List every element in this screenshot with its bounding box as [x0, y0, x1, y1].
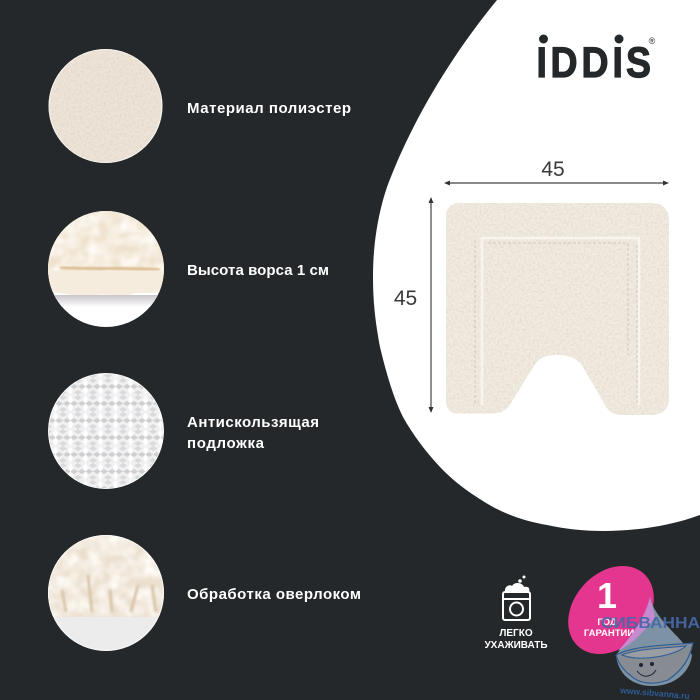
watermark: drop with bathtub — [616, 597, 693, 686]
height dimension — [394, 197, 434, 413]
feature 3 label: подложка — [187, 435, 265, 452]
white curved panel — [373, 0, 700, 531]
bath mat product photo — [446, 203, 669, 415]
logo: IDDIS — [537, 39, 651, 87]
feature 3 label — [187, 414, 319, 452]
feature 2 label: Высота ворса 1 см — [187, 262, 329, 279]
feature 4: overlock swatch — [48, 535, 164, 651]
warranty badge — [551, 549, 671, 671]
feature 4 label: Обработка оверлоком — [187, 586, 361, 603]
logo: ® — [649, 36, 656, 46]
feature 1 label: Материал полиэстер — [187, 100, 351, 117]
easy care label: УХАЖИВАТЬ — [484, 640, 548, 651]
width dimension: 45 — [541, 158, 565, 181]
easy care label: ЛЕГКО — [499, 628, 533, 639]
icon: washing machine — [503, 576, 530, 620]
width dimension — [444, 158, 669, 186]
warranty badge: 1 — [597, 575, 617, 616]
watermark: brand text: СИБВАННА — [601, 615, 700, 632]
height dimension: 45 — [394, 287, 417, 310]
feature 3 label: Антискользящая — [187, 414, 319, 431]
warranty badge: ГАРАНТИИ — [584, 628, 634, 639]
warranty badge: ГОД — [597, 617, 617, 628]
feature 1: material swatch — [48, 49, 162, 163]
feature 2: pile height swatch — [48, 211, 164, 327]
easy care label — [484, 628, 548, 651]
feature 3: anti-slip backing swatch — [48, 373, 164, 489]
